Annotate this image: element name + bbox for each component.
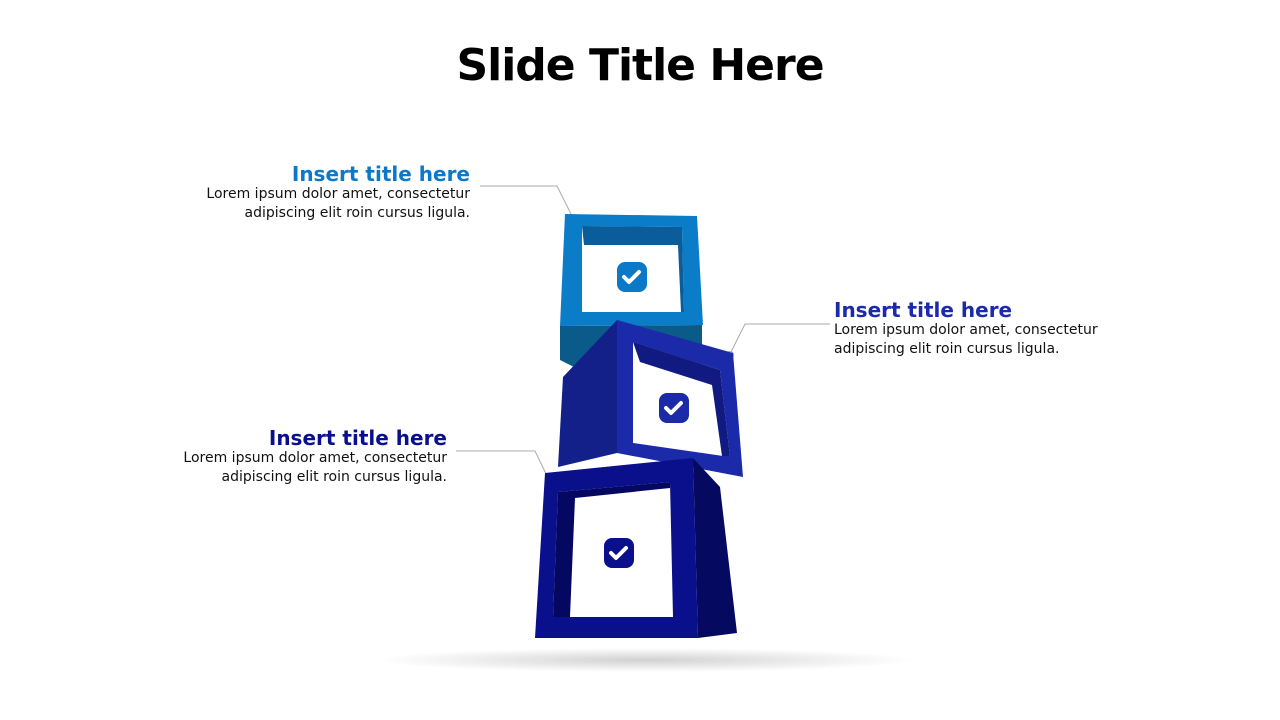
callout: top left — [206, 162, 470, 221]
cube 2 (middle) — [558, 320, 743, 477]
connector lines — [456, 186, 830, 486]
callout: right: Insert title here — [834, 298, 1012, 322]
callout: right — [834, 298, 1098, 357]
callout: right: Lorem ipsum dolor amet, consectetur — [834, 322, 1098, 338]
callout: bottom left: Lorem ipsum dolor amet, consectetur — [183, 450, 447, 466]
callout: bottom left: adipiscing elit roin cursus ligula. — [222, 469, 447, 485]
callout: right: adipiscing elit roin cursus ligula. — [834, 341, 1059, 357]
callout: bottom left — [183, 426, 447, 485]
callout: bottom left: Insert title here — [269, 426, 447, 450]
cube 1 (top) — [560, 214, 703, 380]
shadow — [375, 648, 915, 672]
title: Slide Title Here — [456, 40, 824, 91]
cube 3 (bottom) — [535, 458, 737, 638]
callout: top left: Lorem ipsum dolor amet, consectetur — [206, 186, 470, 202]
callout: top left: adipiscing elit roin cursus ligula. — [245, 205, 470, 221]
callout: top left: Insert title here — [292, 162, 470, 186]
